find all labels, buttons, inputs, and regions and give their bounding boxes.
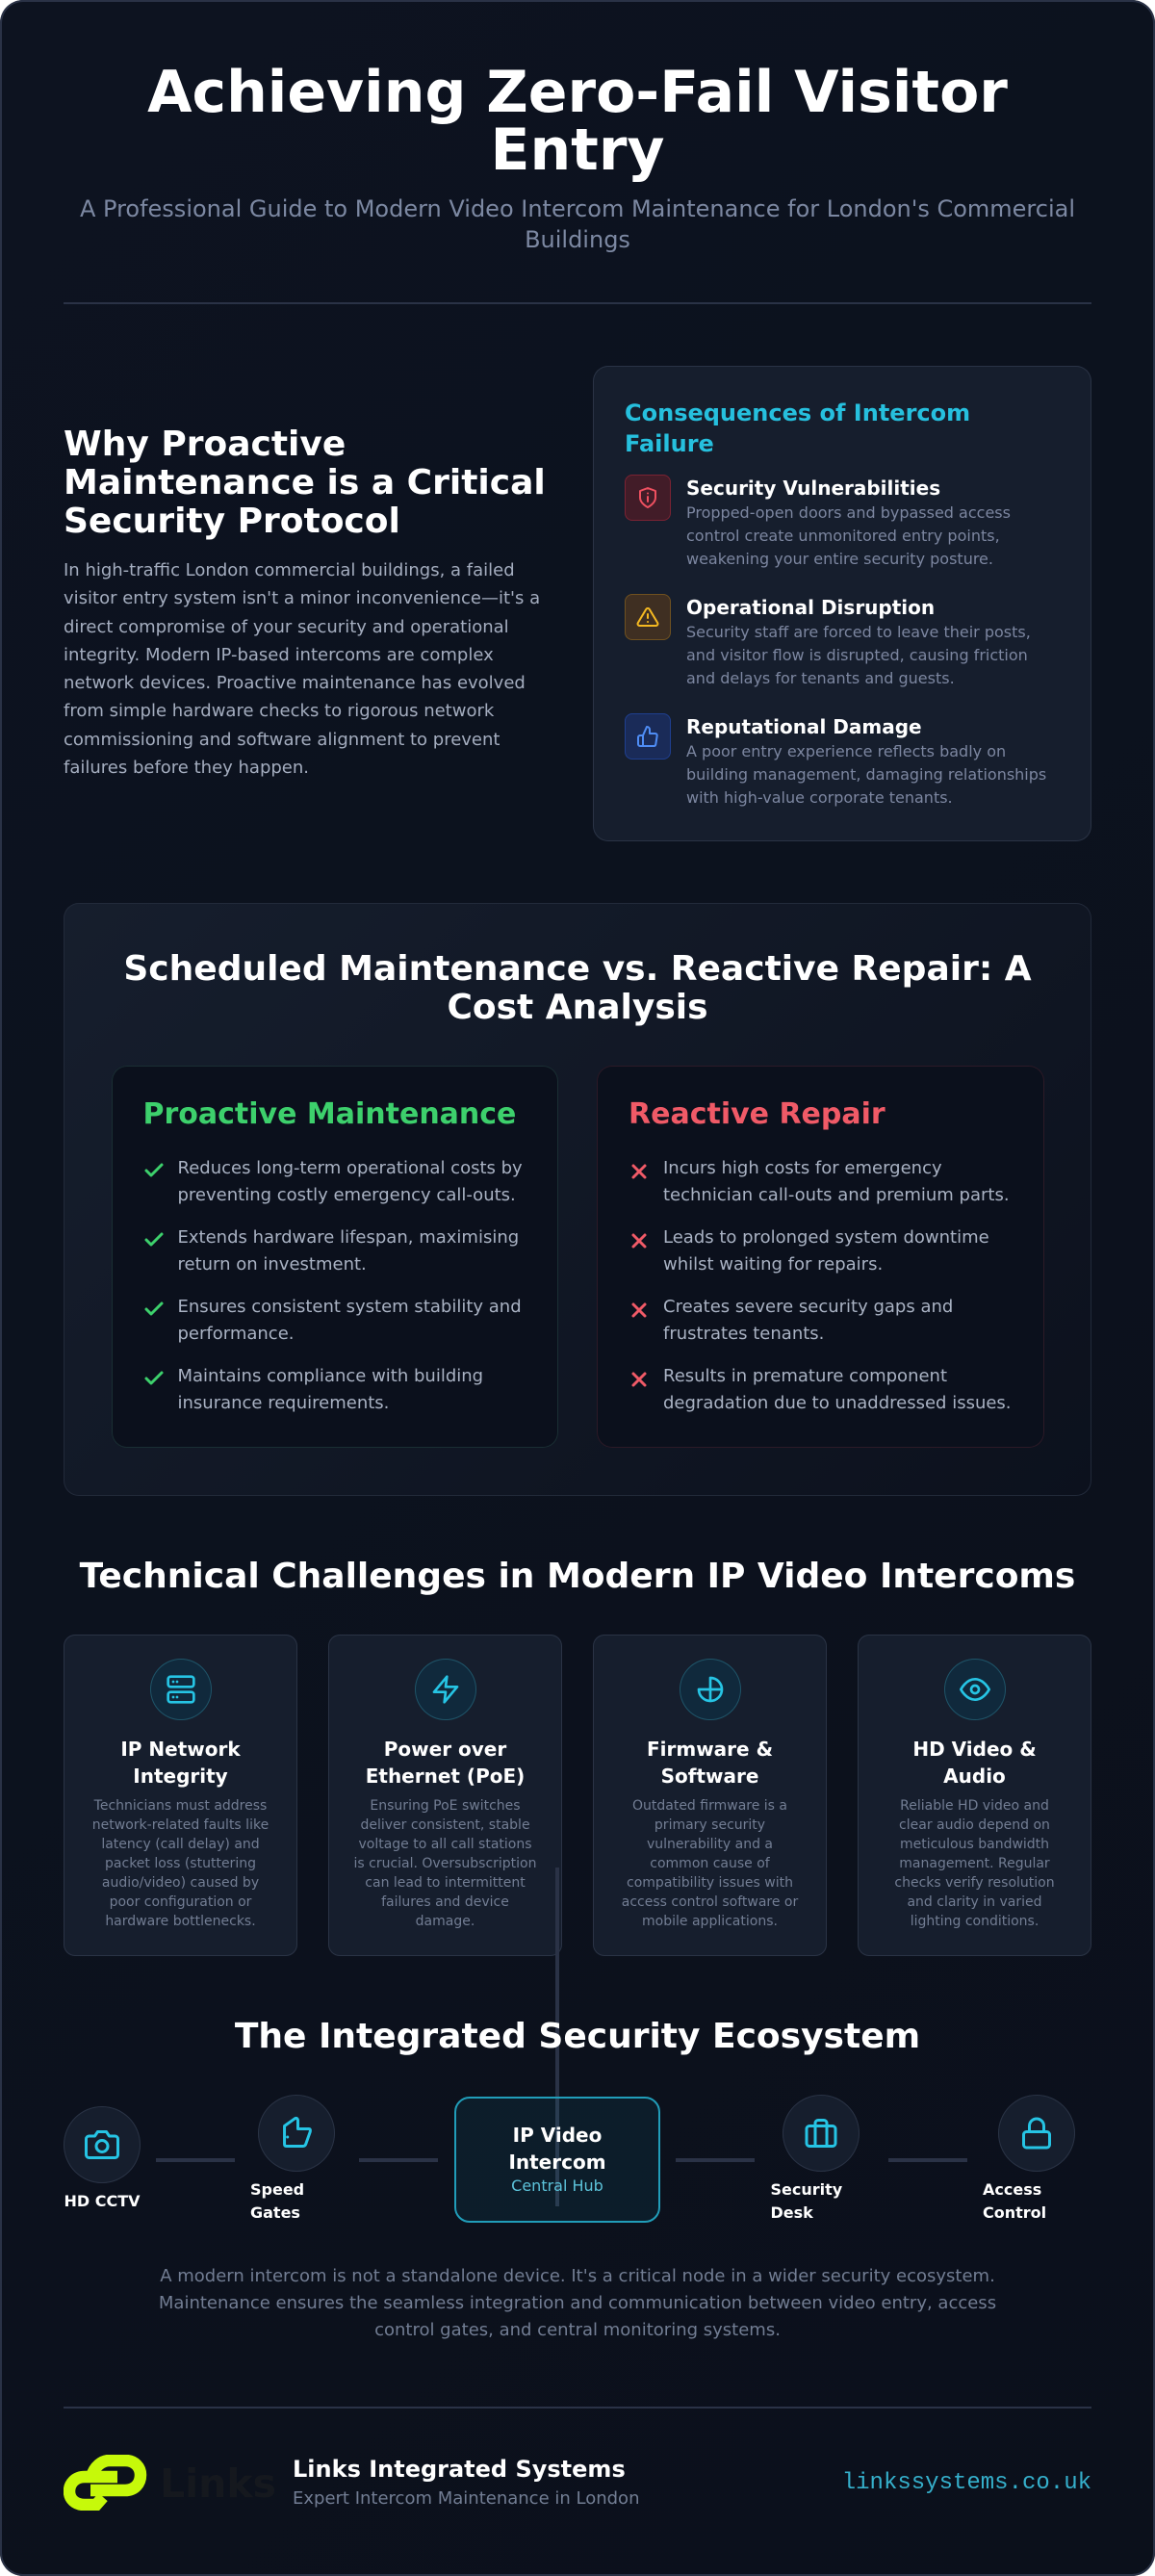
connector bbox=[359, 2158, 438, 2162]
list item: technician call-outs and premium parts. bbox=[663, 1185, 1010, 1205]
card text: vulnerability and a bbox=[647, 1837, 773, 1852]
list item: insurance requirements. bbox=[177, 1393, 389, 1413]
connector bbox=[676, 2158, 755, 2162]
list item bbox=[177, 1227, 519, 1275]
icon: warning triangle bbox=[625, 594, 671, 640]
text block: why proactive maintenance: integrity. Modern IP-based intercoms are complex bbox=[64, 645, 494, 665]
text block: why proactive maintenance: In high-traffic London commercial buildings, a failed bbox=[64, 560, 515, 580]
icon: lightning bolt bbox=[414, 1659, 475, 1720]
icon: camera bbox=[85, 2130, 119, 2159]
icon: check bbox=[144, 1301, 164, 1316]
item text: security vulnerabilities: Propped-open doors and bypassed access bbox=[686, 503, 1011, 522]
list item: Reduces long-term operational costs by bbox=[177, 1158, 523, 1178]
label: access control: Access bbox=[983, 2180, 1041, 2199]
card text: poor configuration or bbox=[110, 1894, 251, 1910]
list item: Creates severe security gaps and bbox=[663, 1297, 953, 1317]
heading: why proactive maintenance: Security Protocol bbox=[64, 502, 400, 541]
list item: Leads to prolonged system downtime bbox=[663, 1227, 989, 1248]
item text: security vulnerabilities bbox=[686, 503, 1011, 568]
item text: security vulnerabilities: weakening your entire security posture. bbox=[686, 550, 993, 568]
card text: hardware bottlenecks. bbox=[105, 1914, 256, 1929]
heading: cost analysis bbox=[123, 949, 1032, 1027]
icon: shield bbox=[625, 475, 671, 521]
label: security desk bbox=[770, 2180, 842, 2222]
label: access control: Control bbox=[983, 2203, 1046, 2222]
icon: thumbs up bbox=[625, 713, 671, 760]
icon: check bbox=[144, 1163, 164, 1177]
card: proactive maintenance bbox=[112, 1066, 558, 1448]
icon: briefcase bbox=[805, 2119, 837, 2148]
card text: management. Regular bbox=[899, 1856, 1050, 1871]
panel heading: Consequences of Intercom bbox=[625, 399, 970, 426]
item text: operational disruption: and delays for tenants and guests. bbox=[686, 669, 955, 687]
card: reactive repair bbox=[597, 1066, 1043, 1448]
list item bbox=[663, 1158, 1010, 1205]
item text: reputational damage bbox=[686, 742, 1046, 807]
card text: compatibility issues with bbox=[627, 1875, 793, 1891]
logo bbox=[64, 2455, 279, 2511]
logo word: Links bbox=[160, 2460, 276, 2507]
card text: Reliable HD video and bbox=[900, 1798, 1049, 1814]
card title: Audio bbox=[943, 1765, 1006, 1788]
card text bbox=[622, 1798, 799, 1929]
card text: deliver consistent, stable bbox=[360, 1817, 530, 1833]
logo mark: chain links bbox=[64, 2455, 147, 2511]
item title: operational disruption: Operational Disruption bbox=[686, 596, 935, 619]
card title bbox=[912, 1738, 1037, 1788]
icon: cross bbox=[631, 1164, 647, 1179]
node: speed gates bbox=[258, 2095, 335, 2172]
icon: padlock bbox=[1022, 2118, 1051, 2149]
card text: is crucial. Oversubscription bbox=[354, 1856, 536, 1871]
panel: consequences of intercom failure bbox=[593, 366, 1091, 841]
card text: common cause of bbox=[650, 1856, 770, 1871]
card title bbox=[647, 1738, 773, 1788]
vertical connector line bbox=[555, 1868, 559, 2206]
heading: why proactive maintenance: Maintenance is a Critical bbox=[64, 463, 546, 502]
card text: Technicians must address bbox=[94, 1798, 267, 1814]
heading: integrated security ecosystem: The Integrated Security Ecosystem bbox=[235, 2017, 920, 2056]
connector bbox=[156, 2158, 235, 2162]
icon: cross bbox=[631, 1233, 647, 1249]
central hub: IP video intercom bbox=[454, 2097, 660, 2223]
list item bbox=[663, 1227, 989, 1275]
label: security desk: Desk bbox=[770, 2203, 813, 2222]
connector bbox=[888, 2158, 967, 2162]
list item: Ensures consistent system stability and bbox=[177, 1297, 522, 1317]
item title: security vulnerabilities: Security Vulnerabilities bbox=[686, 477, 940, 500]
caption: A modern intercom is not a standalone device. It's a critical node in a wider security ecosystem. bbox=[160, 2266, 995, 2286]
card text: packet loss (stuttering bbox=[105, 1856, 256, 1871]
panel heading: Failure bbox=[625, 430, 714, 457]
footer tagline: Expert Intercom Maintenance in London bbox=[293, 2487, 639, 2509]
list item: Results in premature component bbox=[663, 1366, 947, 1386]
label: security desk: Security bbox=[770, 2180, 842, 2199]
icon: server bbox=[150, 1659, 212, 1720]
card text: clear audio depend on bbox=[899, 1817, 1050, 1833]
card: power over ethernet bbox=[328, 1635, 562, 1956]
card text: Ensuring PoE switches bbox=[370, 1798, 521, 1814]
icon: segmented disc bbox=[680, 1659, 741, 1720]
card: firmware and software bbox=[593, 1635, 827, 1956]
card text: access control software or bbox=[622, 1894, 798, 1910]
title: Entry bbox=[490, 116, 665, 184]
hub subtitle: Central Hub bbox=[511, 2177, 603, 2195]
item text: operational disruption bbox=[686, 623, 1031, 687]
card text: Outdated firmware is a bbox=[632, 1798, 787, 1814]
label: HD CCTV: HD CCTV bbox=[64, 2192, 141, 2210]
item text: reputational damage: with high-value corporate tenants. bbox=[686, 788, 953, 807]
title: Achieving Zero-Fail Visitor bbox=[147, 59, 1008, 126]
card title: Integrity bbox=[133, 1765, 228, 1788]
list item: Incurs high costs for emergency bbox=[663, 1158, 942, 1178]
card title: Power over bbox=[384, 1738, 506, 1761]
card heading: proactive: Proactive Maintenance bbox=[142, 1097, 516, 1131]
card text: primary security bbox=[654, 1817, 765, 1833]
text block: why proactive maintenance: network devices. Proactive maintenance has evolved bbox=[64, 673, 526, 693]
list item: return on investment. bbox=[177, 1254, 367, 1275]
heading: cost analysis: Cost Analysis bbox=[447, 988, 708, 1027]
card text bbox=[92, 1798, 269, 1929]
heading: technical challenges: Technical Challenges in Modern IP Video Intercoms bbox=[80, 1557, 1075, 1596]
list item: preventing costly emergency call-outs. bbox=[177, 1185, 516, 1205]
card text bbox=[354, 1798, 536, 1929]
card text: can lead to intermittent bbox=[365, 1875, 526, 1891]
label: speed gates: Gates bbox=[250, 2203, 300, 2222]
text block: why proactive maintenance bbox=[64, 560, 540, 778]
heading: why proactive maintenance bbox=[64, 425, 546, 541]
caption bbox=[64, 2263, 1091, 2344]
footer website: linkssystems.co.uk bbox=[842, 2470, 1091, 2496]
item text: reputational damage: building management, damaging relationships bbox=[686, 765, 1046, 784]
hub title: Intercom bbox=[508, 2151, 606, 2174]
node: access control bbox=[998, 2095, 1075, 2172]
list item: frustrates tenants. bbox=[663, 1324, 824, 1344]
card: HD video and audio bbox=[858, 1635, 1091, 1956]
list item bbox=[177, 1366, 483, 1413]
card text: voltage to all call stations bbox=[358, 1837, 532, 1852]
card text: checks verify resolution bbox=[894, 1875, 1055, 1891]
card text bbox=[894, 1798, 1055, 1929]
icon: thumb bbox=[283, 2116, 312, 2148]
text block: why proactive maintenance: direct compromise of your security and operational bbox=[64, 616, 509, 637]
card title bbox=[366, 1738, 525, 1788]
card title: Software bbox=[661, 1765, 758, 1788]
card text: and clarity in varied bbox=[907, 1894, 1042, 1910]
list item: whilst waiting for repairs. bbox=[663, 1254, 883, 1275]
item title: reputational damage: Reputational Damage bbox=[686, 715, 922, 738]
caption: Maintenance ensures the seamless integration and communication between video entry, access bbox=[159, 2293, 996, 2313]
heading: cost analysis: Scheduled Maintenance vs. Reactive Repair: A bbox=[123, 949, 1032, 989]
text block: why proactive maintenance: commissioning and software alignment to prevent bbox=[64, 730, 500, 749]
node: HD CCTV bbox=[64, 2106, 141, 2183]
card heading: reactive: Reactive Repair bbox=[629, 1097, 886, 1131]
title bbox=[147, 59, 1008, 184]
card title: IP Network bbox=[120, 1738, 241, 1761]
card title: Ethernet (PoE) bbox=[366, 1765, 525, 1788]
icon: check bbox=[144, 1371, 164, 1385]
card text: latency (call delay) and bbox=[101, 1837, 260, 1852]
card title: Firmware & bbox=[647, 1738, 773, 1761]
card text: meticulous bandwidth bbox=[900, 1837, 1049, 1852]
text block: why proactive maintenance: failures before they happen. bbox=[64, 758, 309, 778]
node: security desk bbox=[783, 2095, 860, 2172]
hub title: IP Video bbox=[513, 2124, 602, 2147]
icon: cross bbox=[631, 1302, 647, 1318]
subtitle: A Professional Guide to Modern Video Intercom Maintenance for London's Commercial bbox=[80, 195, 1075, 222]
list item: Extends hardware lifespan, maximising bbox=[177, 1227, 519, 1248]
text block: why proactive maintenance: from simple hardware checks to rigorous network bbox=[64, 701, 494, 721]
icon: cross bbox=[631, 1372, 647, 1387]
card title bbox=[120, 1738, 241, 1788]
list item bbox=[177, 1158, 523, 1205]
item text: security vulnerabilities: control create unmonitored entry points, bbox=[686, 527, 1000, 545]
icon: eye bbox=[943, 1659, 1005, 1720]
subtitle bbox=[80, 195, 1075, 253]
list item bbox=[663, 1297, 953, 1344]
card text: audio/video) caused by bbox=[102, 1875, 259, 1891]
list item: performance. bbox=[177, 1324, 295, 1344]
list item: degradation due to unaddressed issues. bbox=[663, 1393, 1012, 1413]
panel: cost analysis bbox=[64, 903, 1091, 1496]
footer company name: Links Integrated Systems bbox=[293, 2456, 626, 2483]
list item: Maintains compliance with building bbox=[177, 1366, 483, 1386]
text block: why proactive maintenance: visitor entry system isn't a minor inconvenience—it's a bbox=[64, 588, 540, 608]
icon: check bbox=[144, 1232, 164, 1247]
label: speed gates: Speed bbox=[250, 2180, 304, 2199]
list item bbox=[663, 1366, 1012, 1413]
label: access control bbox=[983, 2178, 1046, 2225]
card text: mobile applications. bbox=[642, 1914, 778, 1929]
caption: control gates, and central monitoring systems. bbox=[374, 2320, 781, 2340]
card text: network-related faults like bbox=[92, 1817, 269, 1833]
heading: why proactive maintenance: Why Proactive bbox=[64, 425, 346, 464]
item text: reputational damage: A poor entry experience reflects badly on bbox=[686, 742, 1006, 760]
item text: operational disruption: and visitor flow is disrupted, causing friction bbox=[686, 646, 1028, 664]
hub title bbox=[508, 2124, 606, 2174]
card title: HD Video & bbox=[912, 1738, 1037, 1761]
card text: damage. bbox=[416, 1914, 475, 1929]
label: speed gates bbox=[250, 2180, 304, 2222]
item text: operational disruption: Security staff are forced to leave their posts, bbox=[686, 623, 1031, 641]
card text: failures and device bbox=[381, 1894, 509, 1910]
panel heading bbox=[625, 399, 970, 457]
card: IP network integrity bbox=[64, 1635, 297, 1956]
list item bbox=[177, 1297, 522, 1344]
card text: lighting conditions. bbox=[911, 1914, 1039, 1929]
subtitle: Buildings bbox=[525, 226, 630, 253]
